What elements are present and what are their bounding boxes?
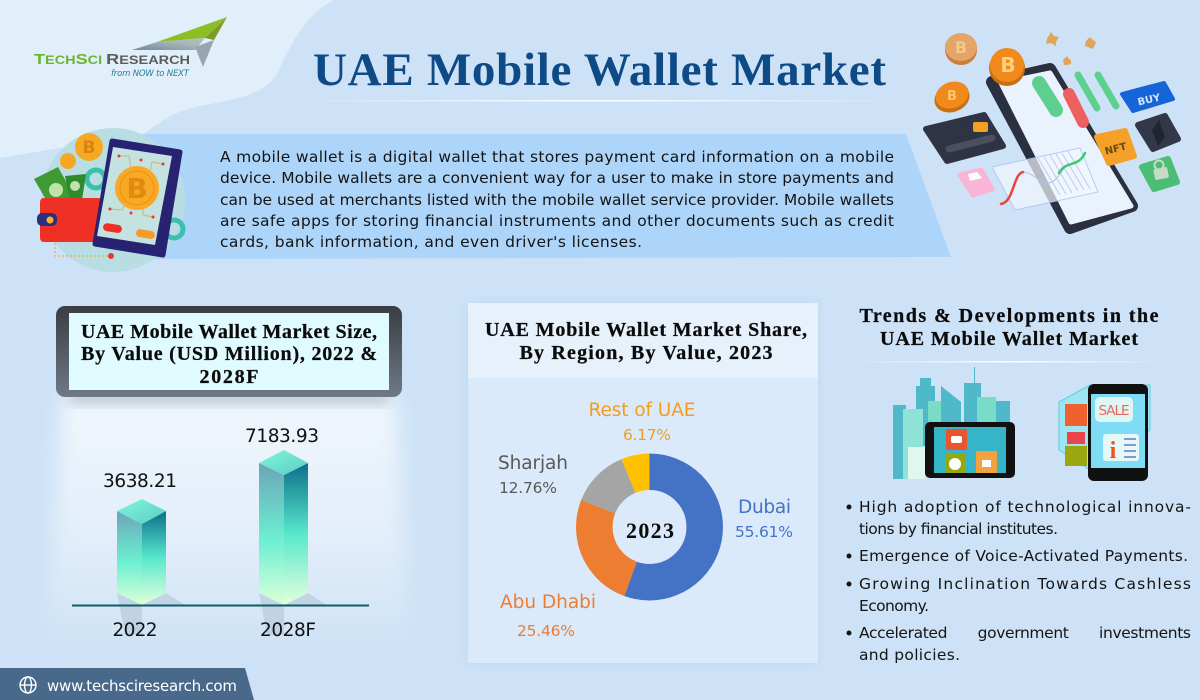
label: Rest of UAE: 6.17% — [623, 426, 671, 444]
trends bullet list: Growing Inclination Towards Cashless — [859, 575, 1191, 593]
trends bullet list — [846, 498, 1191, 664]
icon: smartphone with crypto trading: NFT — [1104, 141, 1128, 158]
trends bullet list: High adoption of technological innova- — [859, 498, 1191, 516]
trends heading: UAE Mobile Wallet Market — [880, 328, 1138, 350]
logo tagline: from NOW to NEXT — [111, 69, 190, 79]
description text: device. Mobile wallets are a convenient way for a user to make in store payments and — [220, 169, 894, 187]
value labels: 2022 — [112, 620, 158, 641]
label: Sharjah: 12.76% — [499, 479, 557, 497]
icon: city with tablet — [893, 367, 1015, 479]
trends bullet list: and policies. — [859, 646, 960, 664]
trends bullet list: Accelerated government investments — [859, 624, 1191, 642]
icon: smartphone with crypto trading: BUY — [1137, 92, 1162, 108]
panel: market share — [468, 303, 818, 663]
label: Rest of UAE — [588, 400, 696, 444]
trends bullet list: Emergence of Voice-Activated Payments. — [859, 547, 1188, 565]
icon: phone with sale shelf: SALE — [1098, 403, 1130, 419]
description text — [220, 148, 894, 251]
share heading: UAE Mobile Wallet Market Share, — [485, 319, 807, 341]
chart heading: UAE Mobile Wallet Market Size, — [81, 321, 377, 343]
trends bullet list: Economy. — [859, 597, 929, 615]
logo wordmark: TECH SCI RESEARCH — [34, 51, 190, 68]
description text: can be used at merchants listed with the mobile wallet service provider. Mobile wallets — [220, 191, 894, 209]
icon: wallet and bitcoin tablet: B — [126, 172, 148, 205]
donut chart — [594, 472, 705, 582]
donut center year: 2023 — [626, 518, 674, 543]
title: UAE Mobile Wallet Market — [313, 44, 886, 96]
icon: phone with sale shelf — [1059, 384, 1150, 481]
share heading: By Region, By Value, 2023 — [520, 342, 772, 364]
trends bullet list: tions by financial institutes. — [859, 520, 1058, 538]
label: Dubai — [735, 497, 793, 541]
icon: smartphone with crypto trading: B — [1000, 53, 1016, 77]
label: Abu Dhabi: 25.46% — [517, 622, 575, 640]
description banner — [130, 134, 951, 259]
footer bar — [0, 668, 254, 700]
icon: globe — [20, 677, 36, 693]
label: Abu Dhabi: Abu Dhabi — [500, 592, 596, 613]
bar: 2022 — [117, 499, 166, 605]
label: Abu Dhabi — [500, 592, 596, 640]
value labels: 2028F — [260, 620, 316, 641]
value labels: 7183.93 — [245, 426, 319, 447]
bar: 2028F — [259, 450, 308, 605]
chart heading — [81, 321, 377, 388]
label: Sharjah — [498, 453, 568, 497]
logo — [34, 17, 227, 79]
description text: cards, bank information, and even driver's licenses. — [220, 233, 642, 251]
label: Rest of UAE: Rest of UAE — [588, 400, 696, 421]
icon: phone with sale shelf: i — [1110, 438, 1117, 464]
label: Dubai: 55.61% — [735, 523, 793, 541]
bar shadows — [117, 593, 327, 635]
icon: smartphone with crypto trading — [926, 32, 1178, 228]
icon: smartphone with crypto trading: B — [955, 38, 967, 57]
share heading — [485, 319, 807, 364]
value labels — [103, 426, 319, 641]
icon: wallet and bitcoin tablet: B — [83, 138, 95, 158]
label: Sharjah: Sharjah — [498, 453, 568, 474]
icon: wallet and bitcoin tablet — [34, 128, 185, 272]
background light wave — [0, 0, 335, 158]
panel: market size chart — [45, 306, 412, 655]
phone frame heading — [56, 306, 402, 397]
description text: are safe apps for storing financial instruments and other documents such as credit — [220, 212, 894, 230]
trends heading: Trends & Developments in the — [860, 305, 1159, 327]
value labels: 3638.21 — [103, 471, 177, 492]
chart heading: By Value (USD Million), 2022 & — [81, 343, 377, 365]
trends heading — [860, 305, 1159, 350]
website url: www.techsciresearch.com — [47, 677, 237, 695]
chart heading: 2028F — [200, 366, 258, 388]
icon: smartphone with crypto trading: B — [947, 89, 957, 104]
description text: A mobile wallet is a digital wallet that stores payment card information on a mobile — [220, 148, 894, 166]
label: Dubai: Dubai — [738, 497, 791, 518]
